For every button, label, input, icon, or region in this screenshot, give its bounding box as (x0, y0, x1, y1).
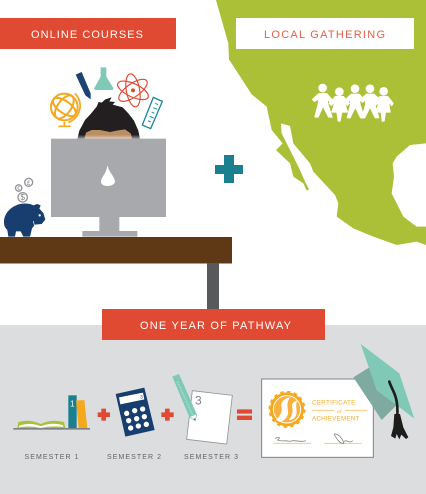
icon: red plus (98, 409, 110, 421)
hair (77, 97, 140, 139)
signatures (275, 434, 353, 443)
heading: online courses (0, 18, 176, 49)
coin symbols: £ (27, 181, 31, 187)
label: semester 2: SEMESTER 2 (107, 454, 161, 461)
heading: local gathering (236, 18, 414, 49)
icon: paper with pencil: 3 (195, 394, 202, 408)
icon: atom (115, 73, 151, 108)
certificate text: CERTIFICATE (312, 400, 355, 407)
icon: globe (50, 92, 80, 126)
heading: one year of pathway: ONE YEAR OF PATHWAY (140, 320, 292, 332)
desk top (0, 237, 232, 264)
desk leg (207, 263, 219, 311)
certificate card (262, 379, 373, 457)
icon: coins (15, 178, 33, 202)
icon: calculator: 3 (140, 395, 143, 401)
certificate text (312, 400, 359, 423)
heading: online courses: ONLINE COURSES (31, 29, 143, 41)
icon: piggy bank (4, 203, 45, 237)
illustration: student at computer (4, 67, 166, 237)
map: North America (216, 0, 426, 245)
coin symbols: € (17, 186, 20, 192)
panel: bottom grey band (0, 325, 426, 494)
coin symbols (17, 181, 31, 202)
icon: equals sign (237, 409, 252, 420)
icon: group of people (313, 84, 393, 121)
icon: flask (94, 67, 113, 90)
monitor screen (51, 139, 166, 217)
icon: pencil (76, 72, 91, 99)
face (84, 129, 132, 139)
icon: ruler (142, 97, 162, 129)
monitor stand (82, 217, 137, 237)
certificate text: ACHIEVEMENT (312, 416, 359, 423)
certificate and graduation cap (262, 344, 414, 457)
icon: shelf with open book and books: 1 (70, 400, 75, 409)
icon: pear logo (101, 165, 115, 186)
semester row icons (13, 374, 252, 444)
coin symbols: $ (20, 193, 25, 202)
label: semester 1: SEMESTER 1 (24, 454, 79, 461)
seal (269, 392, 305, 427)
icon: shelf with open book and books (13, 395, 90, 430)
heading: one year of pathway (102, 309, 325, 340)
graduation cap (353, 344, 414, 439)
label: semester 3: SEMESTER 3 (184, 454, 238, 461)
icon: paper with pencil (172, 374, 232, 444)
certificate text: of (337, 409, 342, 415)
hair fade (77, 135, 141, 139)
icon: teal plus (215, 155, 243, 183)
heading: local gathering: LOCAL GATHERING (264, 29, 385, 41)
icon: calculator (116, 388, 155, 437)
icon: red plus (161, 409, 174, 421)
